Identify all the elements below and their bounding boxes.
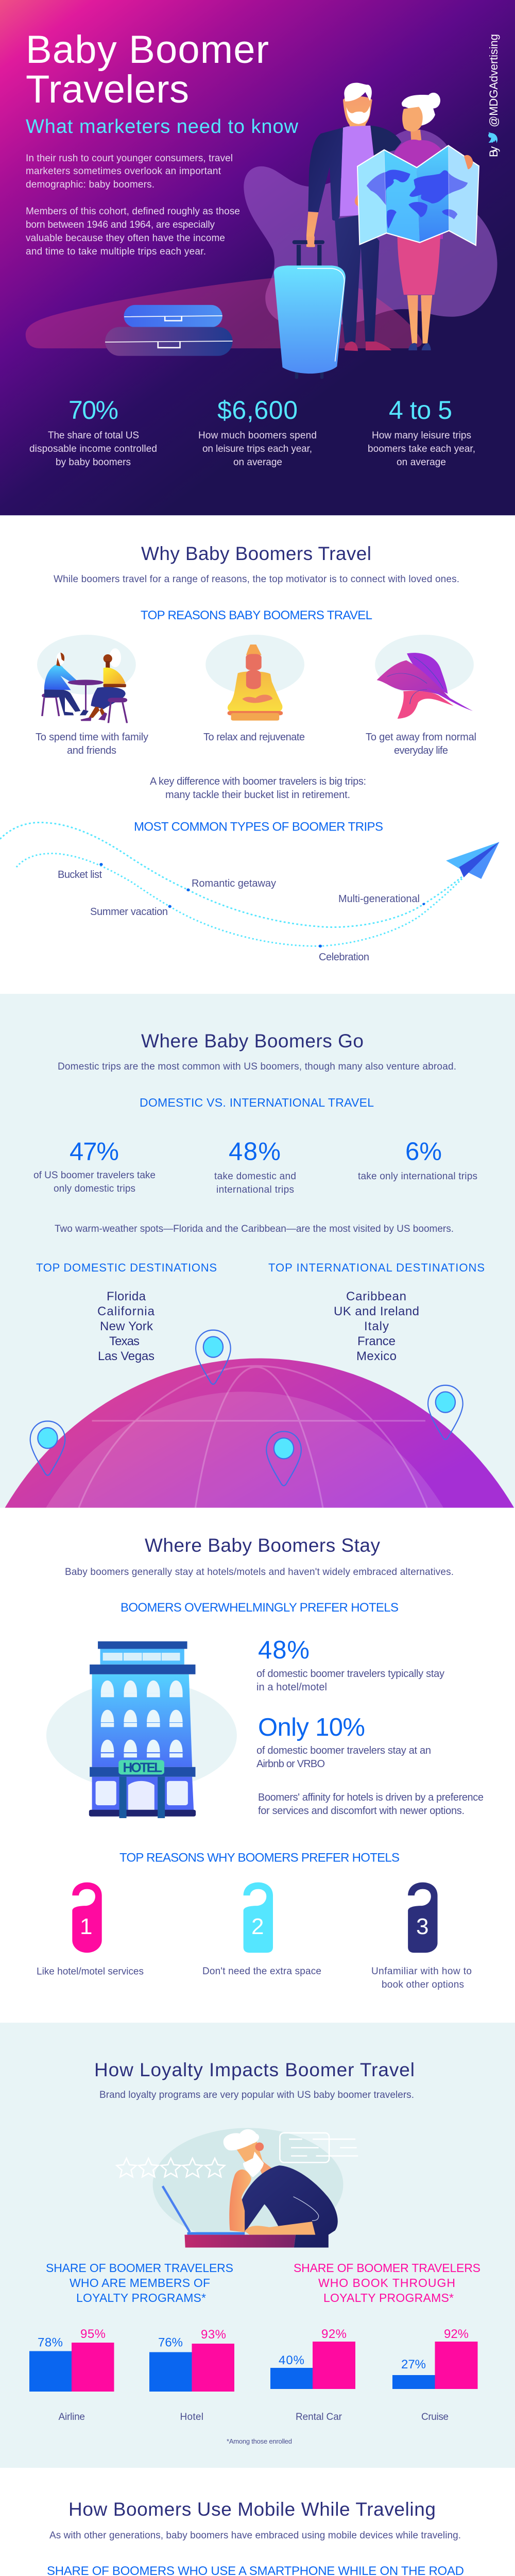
subheading: top reasons: TOP REASONS BABY BOOMERS TRAVEL: [141, 608, 372, 622]
panel: where baby boomers go: [0, 994, 515, 1507]
intro text: While boomers travel for a range of reasons, the top motivator is to connect with loved ones.: [54, 574, 459, 585]
icon: couple at table: [37, 635, 136, 723]
stat: 70%: disposable income controlled: [29, 444, 157, 454]
stat: $6,600: [198, 396, 317, 468]
stat: 47%: of US boomer travelers take: [33, 1170, 156, 1181]
stat: only 10%: Only 10%: [258, 1714, 365, 1741]
stat: $6,600: $6,600: [217, 396, 298, 425]
icon: buddha statue: [205, 635, 304, 721]
panel: how loyalty impacts boomer travel: [0, 2023, 515, 2468]
text: affinity: for services and discomfort with newer options.: [258, 1805, 465, 1817]
stat: $6,600: on leisure trips each year,: [202, 444, 312, 454]
list: domestic: California: [97, 1304, 155, 1318]
bar chart: airline: [29, 2327, 114, 2422]
labels: trip types: Romantic getaway: [192, 878, 276, 889]
list: international: Mexico: [356, 1349, 397, 1363]
chart: dotted flight paths: [0, 822, 468, 947]
byline: By: [487, 146, 500, 157]
list: international: Caribbean: [346, 1290, 406, 1303]
bar chart: airline: Airline: [59, 2412, 85, 2422]
list: international: France: [357, 1334, 396, 1348]
intro text: As with other generations, baby boomers have embraced using mobile devices while traveling.: [49, 2530, 461, 2541]
caption: reason 3: book other options: [382, 1979, 464, 1990]
list: domestic: Florida: [107, 1290, 146, 1303]
stat: 4 to 5: 4 to 5: [389, 396, 452, 425]
caption: reason 3: [371, 1966, 472, 1990]
heading: Why Baby Boomers Travel: [141, 543, 371, 564]
text: affinity: [258, 1792, 484, 1817]
bar chart: cruise: 27%: [401, 2358, 426, 2371]
caption: family and friends: and friends: [67, 745, 116, 756]
list: domestic: Texas: [109, 1334, 140, 1348]
intro text: demographic: baby boomers.: [26, 179, 154, 190]
stat: 48% hotels: of domestic boomer travelers typically stay: [256, 1668, 444, 1680]
intro text: born between 1946 and 1964, are especially: [26, 219, 215, 230]
stat: 4 to 5: [368, 396, 475, 468]
panel: why baby boomers travel: [0, 515, 515, 963]
icon: door hanger 1: 1: [80, 1914, 92, 1939]
stat: 47%: only domestic trips: [54, 1183, 135, 1194]
stat: 48%: [214, 1138, 296, 1195]
illustration: globe with pins: [5, 1330, 514, 1507]
subheading: trip types: MOST COMMON TYPES OF BOOMER TRIPS: [134, 820, 383, 834]
stat: 6%: take only international trips: [358, 1171, 477, 1182]
icon: door hanger 3: [408, 1883, 438, 1953]
heading: Where Baby Boomers Go: [141, 1030, 364, 1052]
bar chart: airline: 78%: [38, 2336, 63, 2349]
labels: trip types: Celebration: [319, 952, 369, 963]
icon: hotel building: [46, 1641, 237, 1818]
chart title: bookers: SHARE OF BOOMER TRAVELERS: [294, 2261, 480, 2275]
chart title: bookers: LOYALTY PROGRAMS*: [323, 2291, 454, 2304]
caption: family and friends: To spend time with family: [36, 732, 148, 743]
intro text: marketers sometimes overlook an important: [26, 166, 221, 177]
subheading: international destinations: TOP INTERNATIONAL DESTINATIONS: [268, 1261, 485, 1274]
caption: reason 1: Like hotel/motel services: [37, 1966, 144, 1977]
stat: 48%: take domestic and: [214, 1171, 296, 1182]
subheading: top reasons hotels: TOP REASONS WHY BOOMERS PREFER HOTELS: [119, 1851, 400, 1865]
stat: 48% hotels: in a hotel/motel: [256, 1682, 327, 1693]
intro text: [26, 153, 240, 257]
caption: relax: To relax and rejuvenate: [203, 732, 305, 743]
illustration: couple with map: [306, 83, 479, 351]
title: Baby Boomer: [26, 28, 269, 72]
stat: 48% hotels: 48%: [258, 1636, 310, 1664]
intro text: In their rush to court younger consumers, travel: [26, 153, 233, 164]
bar chart: cruise: 92%: [444, 2327, 469, 2341]
text: affinity: Boomers' affinity for hotels is driven by a preference: [258, 1792, 484, 1803]
stat: only 10%: of domestic boomer travelers stay at an: [256, 1745, 431, 1756]
subheading: prefer hotels: BOOMERS OVERWHELMINGLY PREFER HOTELS: [121, 1601, 399, 1615]
heading: Where Baby Boomers Stay: [145, 1535, 380, 1556]
bar chart: hotel: 93%: [201, 2328, 226, 2342]
caption: get away: To get away from normal: [366, 732, 476, 743]
icon: door hanger 3: 3: [416, 1914, 428, 1939]
stat: $6,600: on average: [233, 457, 282, 468]
intro text: valuable because they often have the income: [26, 233, 225, 244]
icon: leaves: [375, 635, 474, 719]
illustration: man at laptop: [153, 2128, 344, 2248]
bar chart: rental car: [270, 2327, 355, 2422]
stat: 48%: international trips: [216, 1184, 294, 1195]
caption: reason 3: Unfamiliar with how to: [371, 1966, 472, 1977]
bar chart: cruise: Cruise: [421, 2412, 449, 2422]
chart title: members: [46, 2261, 233, 2304]
bar chart: rental car: 40%: [279, 2353, 304, 2367]
list: international: [334, 1290, 419, 1363]
bar chart: airline: 95%: [80, 2327, 106, 2341]
labels: trip types: Bucket list: [58, 869, 102, 880]
stat: 4 to 5: How many leisure trips: [372, 430, 471, 441]
icon: rating stars: [116, 2158, 225, 2177]
list: international: UK and Ireland: [334, 1304, 419, 1318]
icon: door hanger 1: [72, 1883, 102, 1953]
text: key difference: many tackle their bucket list in retirement.: [165, 789, 350, 801]
bar chart: rental car: 92%: [321, 2327, 347, 2341]
intro text: Baby boomers generally stay at hotels/motels and haven't widely embraced alternatives.: [65, 1567, 454, 1578]
stat: 70%: [29, 396, 157, 468]
caption: reason 2: Don't need the extra space: [202, 1966, 321, 1977]
intro text: Members of this cohort, defined roughly as those: [26, 206, 240, 217]
labels: trip types: Summer vacation: [90, 906, 168, 918]
chart title: members: SHARE OF BOOMER TRAVELERS: [46, 2261, 233, 2275]
icon: rolling suitcase: [274, 236, 346, 379]
text: warm-weather spots: Two warm-weather spots—Florida and the Caribbean—are the most visited by US boomers.: [55, 1224, 454, 1234]
stat: 6%: [358, 1138, 477, 1182]
icon: door hanger 2: 2: [251, 1914, 264, 1939]
stat: 70%: 70%: [68, 396, 118, 425]
bar chart: cruise: [392, 2327, 478, 2422]
chart title: bookers: WHO BOOK THROUGH: [318, 2276, 455, 2290]
list: international: Italy: [364, 1319, 389, 1333]
panel: hero: [0, 0, 515, 515]
labels: trip types: Multi-generational: [338, 893, 420, 905]
title: [26, 28, 269, 111]
intro text: Brand loyalty programs are very popular with US baby boomer travelers.: [99, 2090, 414, 2100]
subheading: domestic vs international: DOMESTIC VS. INTERNATIONAL TRAVEL: [140, 1096, 374, 1109]
subheading: domestic destinations: TOP DOMESTIC DESTINATIONS: [36, 1261, 217, 1274]
list: domestic: [97, 1290, 155, 1363]
icon: hotel building: HOTEL: [123, 1760, 162, 1775]
bar chart: rental car: Rental Car: [296, 2412, 342, 2422]
icon: door hanger 2: [244, 1883, 273, 1953]
illustration: background blobs: [26, 129, 497, 348]
chart title: members: LOYALTY PROGRAMS*: [76, 2291, 206, 2304]
stat: 48% hotels: [256, 1636, 444, 1693]
text: key difference: A key difference with boomer travelers is big trips:: [150, 776, 366, 787]
stat: 4 to 5: boomers take each year,: [368, 444, 475, 454]
labels: trip types: [58, 869, 420, 963]
panel: where baby boomers stay: [37, 1535, 484, 1990]
bar chart: hotel: 76%: [158, 2336, 183, 2349]
list: domestic: Las Vegas: [98, 1349, 154, 1363]
stat: 47%: 47%: [70, 1138, 119, 1165]
stat: 70%: by baby boomers: [56, 457, 131, 468]
heading: How Boomers Use Mobile While Traveling: [68, 2499, 436, 2520]
footnote: *Among those enrolled: [227, 2437, 292, 2445]
heading: How Loyalty Impacts Boomer Travel: [94, 2059, 415, 2080]
caption: get away: everyday life: [394, 745, 448, 756]
icon: stacked cases: [105, 305, 233, 356]
stat: only 10%: [256, 1714, 431, 1770]
text: key difference: [150, 776, 366, 801]
caption: get away: [366, 732, 476, 756]
chart title: members: WHO ARE MEMBERS OF: [70, 2276, 210, 2290]
intro text: Domestic trips are the most common with US boomers, though many also venture abroad.: [58, 1061, 456, 1072]
title: Travelers: [26, 67, 189, 111]
subtitle: What marketers need to know: [26, 116, 299, 138]
stat: 6%: 6%: [405, 1138, 442, 1165]
icon: paper plane: [446, 842, 499, 879]
stat: only 10%: Airbnb or VRBO: [256, 1758, 325, 1770]
byline: @MDGAdvertising: [487, 34, 500, 127]
caption: family and friends: [36, 732, 148, 756]
bar chart: hotel: Hotel: [180, 2412, 203, 2422]
intro text: and time to take multiple trips each year.: [26, 246, 206, 257]
stat: 48%: 48%: [229, 1138, 281, 1165]
stat: $6,600: How much boomers spend: [198, 430, 317, 441]
bar chart: hotel: [149, 2328, 234, 2422]
chart title: bookers: [294, 2261, 480, 2304]
icon: booking card: [280, 2133, 358, 2162]
stat: 47%: [33, 1138, 156, 1194]
stat: 70%: The share of total US: [48, 430, 139, 441]
panel: how boomers use mobile: [35, 2499, 476, 2576]
list: domestic: New York: [100, 1319, 153, 1333]
stat: 4 to 5: on average: [397, 457, 446, 468]
